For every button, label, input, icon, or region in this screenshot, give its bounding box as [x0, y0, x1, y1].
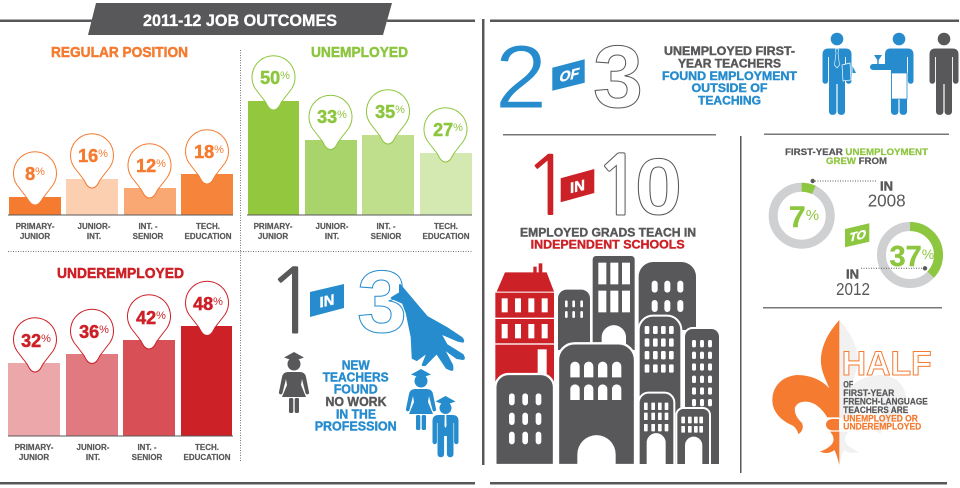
- donut chart: 37 percent: [882, 226, 938, 284]
- badge: in: IN: [570, 177, 585, 197]
- text: of first-year french-language teachers: TEACHERS ARE: [843, 405, 908, 415]
- numeral 10 outlined: 1: [594, 147, 644, 228]
- axis labels: regular position: INT.: [87, 232, 101, 241]
- bar chart: unemployed: %: [280, 70, 290, 82]
- axis labels: unemployed: PRIMARY-: [254, 222, 293, 231]
- badge: to: [845, 223, 869, 247]
- axis labels: underemployed: INT.: [86, 453, 100, 462]
- text: new teachers found no work in the profession: NEW: [342, 358, 370, 372]
- text: of first-year french-language teachers: OF: [843, 379, 854, 389]
- bar chart: underemployed: %: [213, 296, 223, 308]
- bar chart: regular position: 8: [25, 164, 35, 184]
- text: of first-year french-language teachers: FIRST-YEAR: [843, 388, 895, 398]
- heading: first-year unemployment grew from: GREW FROM: [826, 156, 887, 167]
- bar chart: unemployed: 50: [260, 68, 280, 88]
- text: unemployed first-year teachers: UNEMPLOYED FIRST-: [664, 46, 795, 58]
- title banner: [88, 3, 392, 35]
- bar chart: underemployed: 36: [79, 322, 99, 342]
- text: employed grads teach in independent schools: INDEPENDENT SCHOOLS: [531, 238, 685, 252]
- donut chart: 7 percent: [773, 187, 830, 244]
- icon: waiter: [870, 33, 914, 115]
- heading: first-year unemployment grew from: [785, 147, 928, 167]
- panel: unemployed: [247, 44, 472, 241]
- word: half outlined: HALF: [842, 345, 932, 383]
- axis labels: unemployed: EDUCATION: [423, 232, 470, 241]
- bar chart: unemployed: 35: [375, 102, 395, 122]
- callout: in 2012: [836, 266, 927, 299]
- text: of first-year french-language teachers: [843, 379, 928, 431]
- axis labels: regular position: SENIOR: [133, 232, 164, 241]
- text: new teachers found no work in the profession: TEACHERS: [323, 371, 389, 385]
- bar chart: regular position: 18: [194, 142, 214, 162]
- bar chart: underemployed: 42: [136, 308, 156, 328]
- axis labels: underemployed: SENIOR: [132, 453, 163, 462]
- donut chart: 7 percent: %: [806, 207, 819, 224]
- icon: graduate woman gray: [279, 352, 309, 413]
- numeral 2: 2: [495, 28, 547, 128]
- panel: 2 of 3: [495, 27, 958, 128]
- icon: graduate man blue: [432, 396, 458, 457]
- bar chart: unemployed: %: [395, 104, 405, 116]
- panel: half of french-language teachers: [772, 320, 932, 465]
- axis labels: regular position: PRIMARY-: [16, 222, 55, 231]
- axis labels: underemployed: TECH.: [195, 443, 219, 452]
- donut chart: 37 percent: %: [922, 246, 934, 262]
- building: right tall: [684, 328, 720, 465]
- text: new teachers found no work in the profession: NO WORK: [326, 395, 386, 409]
- badge: in: [310, 284, 344, 317]
- axis labels: regular position: TECH.: [196, 222, 220, 231]
- bar chart: underemployed: %: [41, 333, 51, 345]
- building: center: [558, 343, 635, 466]
- numeral 10 outlined: 0: [635, 142, 682, 231]
- building: upper right: [639, 262, 696, 330]
- heading: first-year unemployment grew from: FIRST-YEAR UNEMPLOYMENT: [785, 147, 928, 158]
- text: employed grads teach in independent schools: EMPLOYED GRADS TEACH IN: [520, 226, 696, 240]
- axis labels: regular position: INT. -: [138, 222, 158, 231]
- callout: in 2008: [810, 178, 906, 211]
- panel: first-year unemployment grew: [773, 147, 938, 299]
- panel: underemployed: [8, 265, 233, 462]
- panel: 1 in 3: [265, 252, 464, 457]
- heading: regular position: REGULAR POSITION: [51, 44, 188, 61]
- bar chart: regular position: 12: [136, 156, 156, 176]
- bar chart: regular position: 16: [78, 146, 98, 166]
- text: unemployed first-year teachers: YEAR TEACHERS: [678, 58, 781, 70]
- building: front left: [495, 374, 554, 465]
- illustration: city buildings: [495, 256, 720, 466]
- axis labels: unemployed: SENIOR: [371, 232, 402, 241]
- bar chart: underemployed: [8, 281, 233, 436]
- axis labels: regular position: JUNIOR: [20, 232, 50, 241]
- axis labels: unemployed: [254, 222, 470, 241]
- bar chart: regular position: %: [156, 158, 166, 170]
- bar chart: regular position: %: [214, 144, 224, 156]
- heading: unemployed: UNEMPLOYED: [311, 44, 408, 61]
- donut chart: 7 percent: 7: [789, 201, 806, 234]
- axis labels: regular position: EDUCATION: [185, 232, 232, 241]
- text: unemployed first-year teachers: OUTSIDE OF: [692, 83, 768, 95]
- badge: of: [552, 59, 585, 91]
- icon: reaching hand: [392, 285, 464, 370]
- bar chart: regular position: %: [35, 166, 45, 178]
- text: new teachers found no work in the profession: [315, 358, 397, 434]
- bar chart: underemployed: 48: [193, 294, 213, 314]
- bar chart: unemployed: [247, 56, 472, 215]
- text: new teachers found no work in the profession: PROFESSION: [315, 420, 397, 434]
- numeral 1: 1: [265, 256, 320, 346]
- icon: office worker: [822, 33, 856, 115]
- axis labels: unemployed: INT.: [325, 232, 339, 241]
- axis labels: unemployed: JUNIOR: [258, 232, 288, 241]
- axis labels: underemployed: JUNIOR-: [77, 443, 110, 452]
- bar chart: unemployed: %: [453, 122, 463, 134]
- text: of first-year french-language teachers: UNDEREMPLOYED: [843, 421, 922, 431]
- bar chart: underemployed: %: [156, 310, 166, 322]
- bar chart: unemployed: %: [337, 109, 347, 121]
- numeral 10 outlined: [594, 142, 682, 231]
- icon: fleur-de-lis: [772, 320, 906, 465]
- callout: in 2008: IN: [880, 178, 893, 193]
- building: front right one: [639, 393, 674, 465]
- text: unemployed first-year teachers: TEACHING: [698, 96, 761, 108]
- axis labels: underemployed: PRIMARY-: [15, 443, 54, 452]
- building: small: [558, 290, 590, 350]
- callout: in 2012: 2012: [836, 279, 870, 299]
- callout: in 2012: IN: [846, 266, 859, 281]
- text: unemployed first-year teachers: [662, 46, 797, 108]
- text: new teachers found no work in the profession: IN THE: [336, 407, 376, 421]
- axis labels: unemployed: JUNIOR-: [316, 222, 349, 231]
- numeral 1: 1: [523, 145, 573, 227]
- badge: to: TO: [848, 227, 868, 245]
- building: front right two: [676, 408, 710, 465]
- text: employed grads teach in independent schools: [520, 226, 696, 252]
- numeral 3 outlined: 3: [357, 252, 407, 351]
- building: red house: [495, 263, 554, 381]
- axis labels: underemployed: INT. -: [137, 443, 157, 452]
- text: new teachers found no work in the profession: FOUND: [334, 383, 378, 397]
- badge: of: OF: [558, 66, 581, 86]
- bar chart: unemployed: 33: [317, 107, 337, 127]
- callout: in 2008: 2008: [868, 191, 906, 211]
- panel: 1 in 10: [495, 142, 720, 466]
- axis labels: regular position: [16, 222, 232, 241]
- axis labels: regular position: JUNIOR-: [78, 222, 111, 231]
- bar chart: underemployed: 32: [21, 331, 41, 351]
- bar chart: regular position: [8, 130, 233, 216]
- axis labels: underemployed: JUNIOR: [19, 453, 49, 462]
- text: of first-year french-language teachers: UNEMPLOYED OR: [843, 413, 918, 423]
- bar chart: regular position: %: [98, 148, 108, 160]
- axis labels: underemployed: EDUCATION: [184, 453, 231, 462]
- badge: in: [561, 169, 594, 202]
- donut chart: 37 percent: 37: [890, 241, 922, 273]
- axis labels: unemployed: INT. -: [376, 222, 396, 231]
- text: of first-year french-language teachers: FRENCH-LANGUAGE: [843, 397, 928, 407]
- bar chart: underemployed: %: [99, 324, 109, 336]
- building: middle right: [639, 316, 681, 465]
- panel: regular position: [8, 44, 233, 241]
- text: unemployed first-year teachers: FOUND EMPLOYMENT: [662, 71, 797, 83]
- numeral 3 outlined: 3: [593, 27, 643, 126]
- axis labels: underemployed: [15, 443, 231, 462]
- icon: gray figure: [930, 33, 958, 115]
- axis labels: unemployed: TECH.: [434, 222, 458, 231]
- icon: graduate woman blue: [406, 369, 436, 430]
- heading: underemployed: UNDEREMPLOYED: [57, 265, 184, 282]
- title banner: 2011-12 JOB OUTCOMES: [143, 11, 337, 30]
- building: tall: [593, 256, 635, 350]
- badge: in: IN: [320, 291, 334, 312]
- bar chart: unemployed: 27: [433, 120, 453, 140]
